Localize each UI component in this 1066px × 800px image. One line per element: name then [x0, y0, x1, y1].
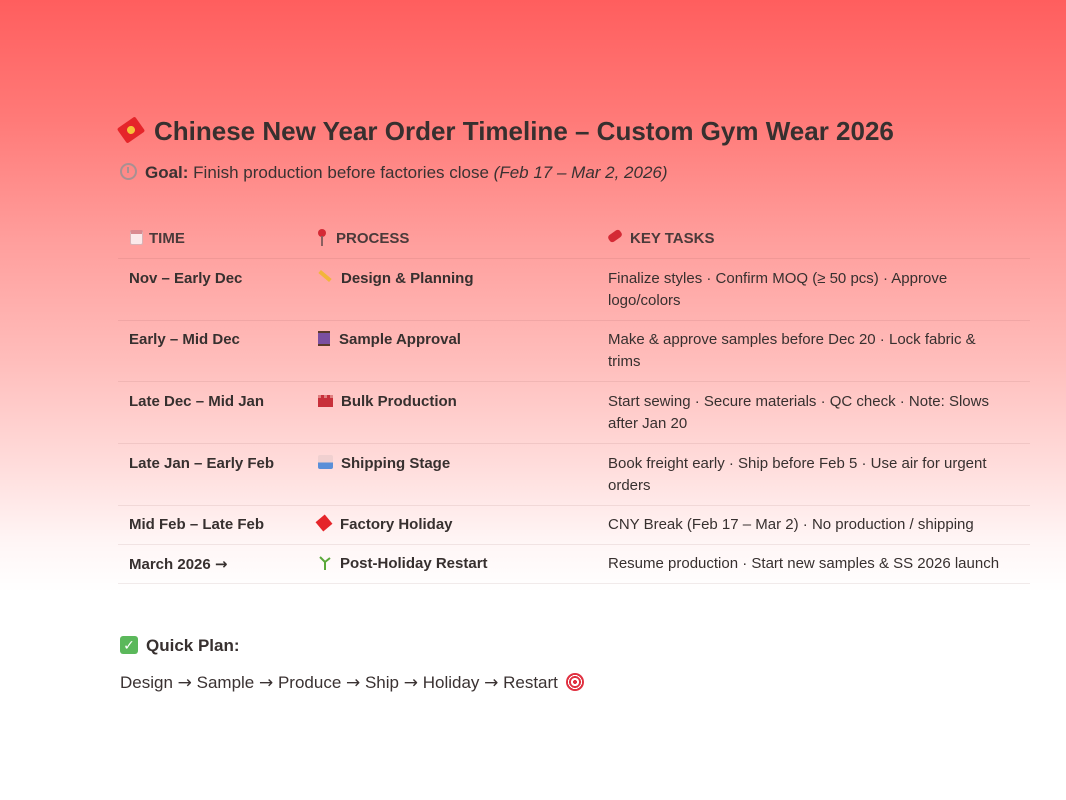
icon: check: [120, 636, 138, 654]
table: trims: [608, 353, 640, 370]
table: orders: [608, 477, 651, 494]
table: Post-Holiday Restart: [340, 555, 488, 572]
icon: check: ✓: [123, 637, 135, 653]
table: Book freight early · Ship before Feb 5 · Use air for urgent: [608, 455, 987, 472]
quick plan flow: Design → Sample → Produce → Ship → Holiday → Restart: [120, 673, 558, 693]
title: Chinese New Year Order Timeline – Custom Gym Wear 2026: [154, 116, 894, 146]
icon: clock: [120, 163, 137, 180]
table: Bulk Production: [341, 393, 457, 410]
icon: target: [566, 673, 584, 691]
icon: red envelope: [117, 116, 145, 144]
table: Design & Planning: [341, 270, 474, 287]
table: CNY Break (Feb 17 – Mar 2) · No production / shipping: [608, 516, 974, 533]
icon: pin: [318, 229, 326, 246]
table: Start sewing · Secure materials · QC check · Note: Slows: [608, 393, 989, 410]
table: after Jan 20: [608, 415, 687, 432]
table: Shipping Stage: [341, 455, 450, 472]
icon: calendar: [130, 230, 143, 245]
table: Finalize styles · Confirm MOQ (≥ 50 pcs) · Approve: [608, 270, 947, 287]
row 5: Mid Feb – Late Feb: [129, 516, 264, 533]
table: PROCESS: [336, 230, 409, 247]
header row: TIME: [149, 230, 185, 247]
table: [118, 229, 1030, 584]
row 6: March 2026 →: [129, 555, 227, 573]
row 1: Nov – Early Dec: [129, 270, 242, 287]
table: Sample Approval: [339, 331, 461, 348]
table: Factory Holiday: [340, 516, 453, 533]
table: logo/colors: [608, 292, 681, 309]
row 2: Early – Mid Dec: [129, 331, 240, 348]
goal subtitle: Goal: Finish production before factories close (Feb 17 – Mar 2, 2026): [145, 163, 668, 182]
row 4: Late Jan – Early Feb: [129, 455, 274, 472]
table: KEY TASKS: [630, 230, 714, 247]
table: Resume production · Start new samples & SS 2026 launch: [608, 555, 999, 572]
quick plan heading: Quick Plan:: [146, 636, 240, 655]
icon: pushpin: [607, 229, 623, 243]
header row: [130, 230, 185, 247]
table: Make & approve samples before Dec 20 · Lock fabric &: [608, 331, 976, 348]
row 3: Late Dec – Mid Jan: [129, 393, 264, 410]
